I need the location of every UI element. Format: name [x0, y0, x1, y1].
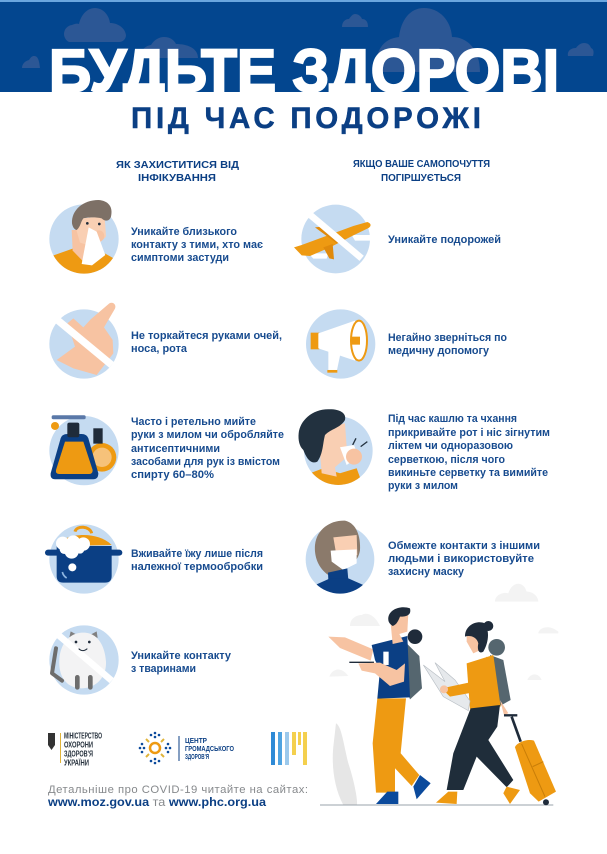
heading: right column [353, 159, 490, 184]
icon: soap bottle [49, 415, 119, 485]
icon: megaphone [306, 309, 375, 379]
text: cover cough: ліктем чи одноразовою [388, 440, 513, 452]
heading: left column: ЯК ЗАХИСТИТИСЯ ВІД [116, 160, 240, 171]
text: limit contacts [388, 540, 540, 578]
text: cover cough: руки з милом [388, 480, 458, 492]
text: seek medical help [388, 332, 508, 357]
man [328, 607, 431, 804]
text: cook food: Вживайте їжу лише після [131, 548, 263, 560]
text: avoid close contact: контакту з тими, хто має [131, 239, 263, 251]
logo: striped mark [271, 732, 307, 765]
text: limit contacts: Обмежте контакти з іншими [388, 540, 540, 552]
text: cover cough: викиньте серветку та вимийте [388, 467, 548, 479]
icon: cooking pot [48, 524, 119, 594]
text: wash hands: антисептичними [131, 443, 220, 455]
heading: right column: ЯКЩО ВАШЕ САМОПОЧУТТЯ [353, 159, 490, 170]
subtitle: ПІД ЧАС ПОДОРОЖІ [131, 102, 481, 135]
text: avoid close contact: симптоми застуди [131, 252, 229, 264]
heading: right column: ПОГІРШУЄТЬСЯ [381, 173, 461, 184]
text: avoid animals: Уникайте контакту [131, 650, 231, 662]
icon: airplane with strike [294, 205, 371, 273]
text: avoid travel: Уникайте подорожей [388, 234, 501, 246]
text: limit contacts: захисну маску [388, 566, 464, 578]
text: cover cough: серветкою, після чого [388, 454, 506, 466]
text: wash hands: Часто і ретельно мийте [131, 416, 256, 428]
text: cook food: належної термообробки [131, 561, 263, 573]
heading: left column [116, 160, 240, 184]
woman [423, 621, 520, 804]
icon: cat with strike [49, 625, 119, 695]
text: cover cough: прикривайте рот і ніс зігнутим [388, 427, 550, 439]
text: wash hands: спирту 60–80% [131, 469, 215, 481]
footer links: www.moz.gov.ua та www.phc.org.ua [47, 795, 266, 809]
text: do not touch face: носа, рота [131, 343, 187, 355]
text: cook food [131, 548, 263, 573]
suitcase [504, 715, 556, 805]
logo: public health center [139, 732, 234, 764]
text: avoid animals: з тваринами [131, 663, 196, 675]
text: wash hands: руки з милом чи обробляйте [131, 429, 284, 441]
text: avoid close contact [131, 226, 263, 264]
title: БУДЬТЕ ЗДОРОВІ [49, 38, 559, 104]
text: avoid animals [131, 650, 231, 675]
text: wash hands [131, 416, 284, 481]
text: seek medical help: Негайно зверніться по [388, 332, 508, 344]
icon: coughing woman [299, 409, 373, 487]
text: seek medical help: медичну допомогу [388, 345, 489, 357]
logo: public health center: ЦЕНТР [185, 738, 207, 745]
text: do not touch face [131, 330, 282, 355]
text: do not touch face: Не торкайтеся руками очей, [131, 330, 282, 342]
logo: public health center: ЗДОРОВ'Я [185, 754, 209, 761]
header band with clouds [0, 0, 607, 92]
text: cover cough [388, 413, 550, 492]
text: wash hands: засобами для рук із вмістом [131, 456, 280, 468]
icon: woman in mask [306, 521, 374, 600]
footer text: Детальніше про COVID-19 читайте на сайтах: [48, 784, 308, 796]
logo: ministry of health: ЗДОРОВ'Я [64, 750, 93, 758]
logo: ministry of health [48, 732, 102, 768]
logo: ministry of health: ОХОРОНИ [64, 740, 93, 750]
logo: ministry of health: МІНІСТЕРСТВО [64, 732, 102, 740]
background clouds [329, 584, 558, 805]
text: avoid close contact: Уникайте близького [131, 226, 238, 238]
logo: ministry of health: УКРАЇНИ [64, 758, 89, 768]
ground line [320, 803, 553, 806]
icon: hand with strike [49, 303, 119, 379]
icon: man blowing nose [49, 200, 119, 277]
logo: public health center: ГРОМАДСЬКОГО [185, 746, 234, 753]
heading: left column: ІНФІКУВАННЯ [138, 173, 216, 184]
illustration: travellers [320, 584, 558, 805]
text: cover cough: Під час кашлю та чхання [388, 413, 517, 425]
text: limit contacts: людьми і використовуйте [388, 553, 534, 565]
